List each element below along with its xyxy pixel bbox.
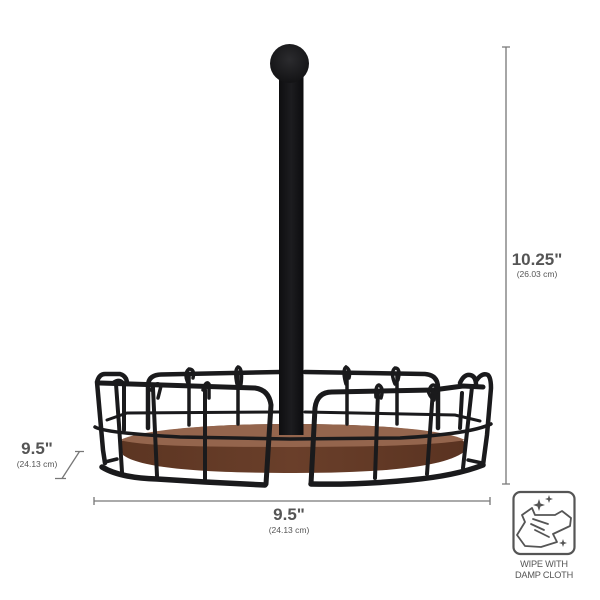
icon caption bbox=[515, 559, 573, 580]
width label: 9.5" bbox=[273, 505, 305, 524]
central pole with ball finial bbox=[270, 44, 309, 435]
product: wire basket and wood base holder bbox=[95, 44, 491, 485]
width label: (24.13 cm) bbox=[269, 525, 309, 535]
wood base bbox=[120, 424, 465, 473]
icon caption: WIPE WITH bbox=[520, 559, 568, 569]
width label bbox=[269, 505, 309, 535]
height label: (26.03 cm) bbox=[517, 269, 557, 279]
front-left wire panel bbox=[97, 374, 271, 485]
icon sparkles bbox=[533, 495, 567, 547]
width dimension line bbox=[94, 497, 490, 505]
icon caption: DAMP CLOTH bbox=[515, 570, 573, 580]
depth label: (24.13 cm) bbox=[17, 459, 57, 469]
front-right wire panel bbox=[311, 374, 491, 484]
height dimension line bbox=[502, 47, 510, 484]
height label: 10.25" bbox=[512, 250, 562, 269]
depth label: 9.5" bbox=[21, 439, 53, 458]
depth label bbox=[17, 439, 57, 469]
back wire rails bbox=[107, 367, 480, 428]
height label bbox=[512, 250, 562, 279]
icon: wipe with damp cloth bbox=[514, 492, 574, 554]
horizontal wire belt bbox=[95, 424, 491, 439]
depth dimension line bbox=[55, 452, 84, 478]
